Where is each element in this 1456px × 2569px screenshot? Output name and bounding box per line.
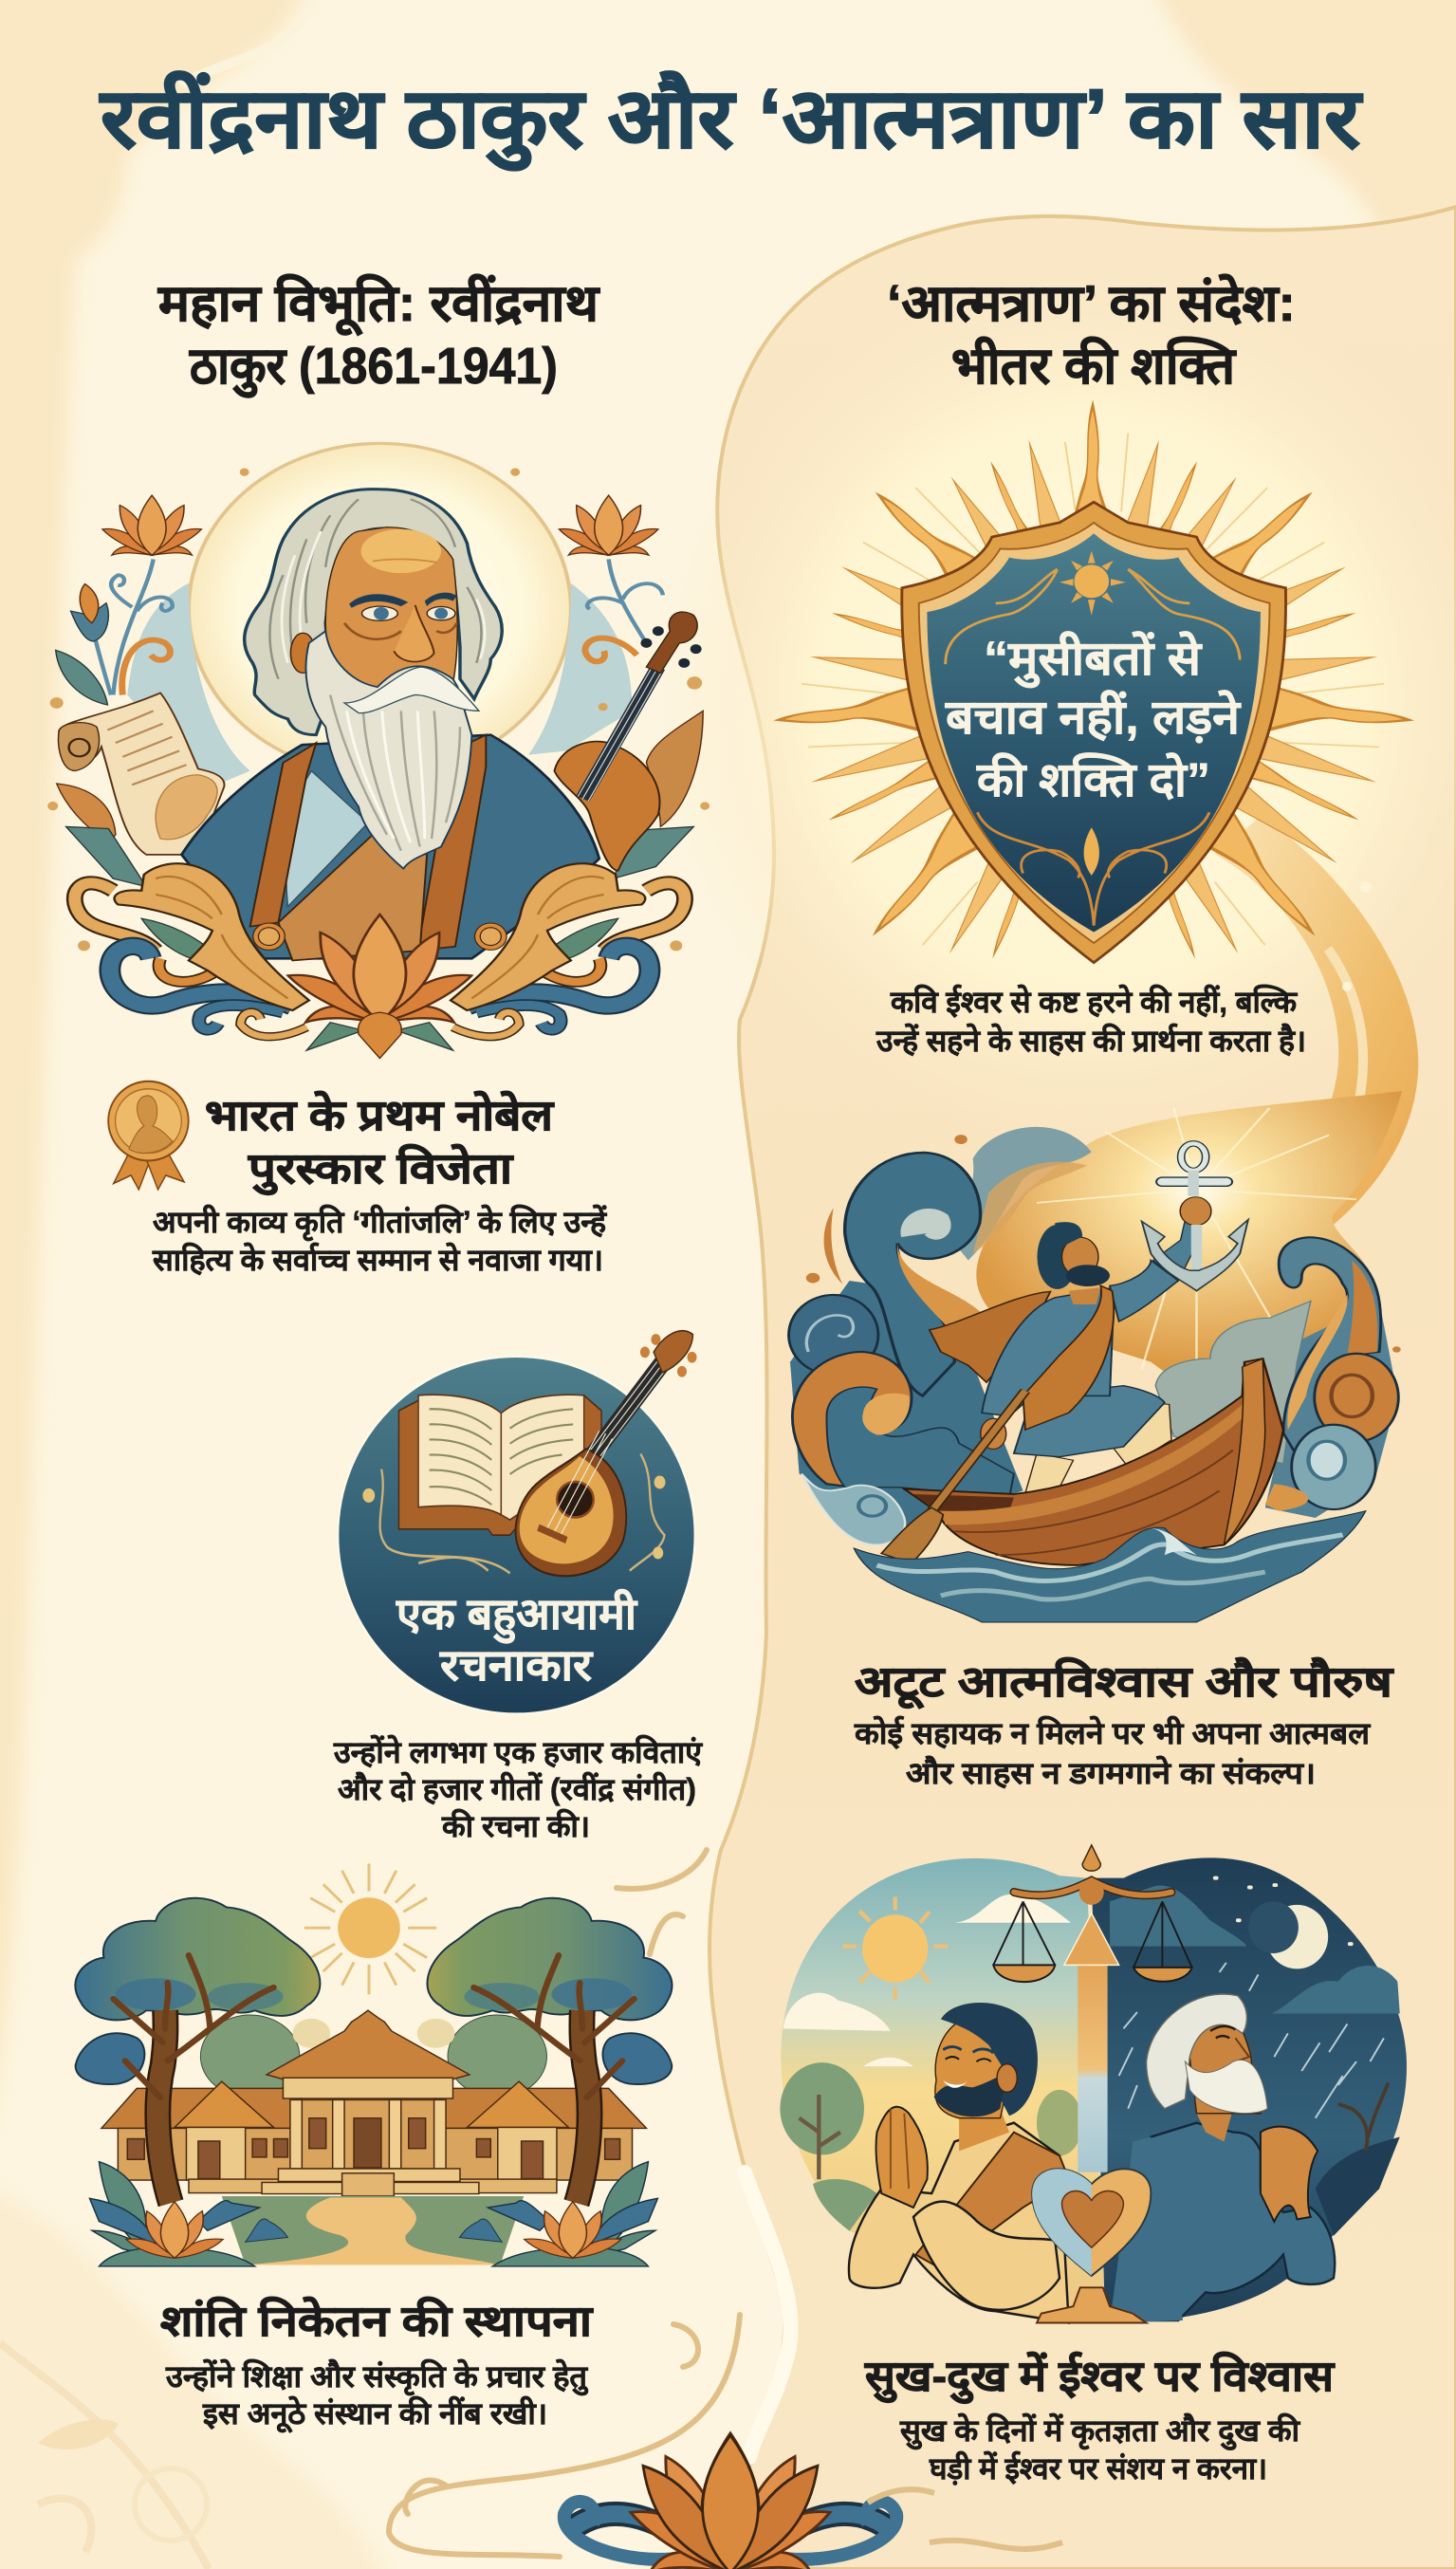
text: Nobel laureate: अपनी काव्य कृति ‘गीतांजलि’ के लिए उन्हें <box>153 1204 607 1242</box>
man <box>930 1197 1211 1501</box>
shield quote: की शक्ति दो” <box>976 752 1210 806</box>
night half <box>1092 1857 1407 2323</box>
decorative dots <box>47 468 710 951</box>
text: Nobel laureate <box>152 1090 607 1277</box>
illustration: man with anchor in boat <box>789 1091 1402 1622</box>
text: Shantiniketan: उन्होंने शिक्षा और संस्कृति के प्रचार हेतु <box>165 2358 589 2396</box>
illustration: Tagore portrait with lotus ornaments <box>47 443 710 1059</box>
shield ornaments <box>946 569 1240 664</box>
title: रवींद्रनाथ ठाकुर और ‘आत्मत्राण’ का सार <box>99 70 1363 171</box>
text: prayer <box>875 984 1306 1058</box>
top lotus flowers <box>102 495 201 555</box>
text: poems and songs: उन्होंने लगभग एक हजार कविताएं <box>333 1734 703 1769</box>
ear <box>290 633 315 673</box>
grey wave behind <box>941 1127 1092 1261</box>
grass and path <box>222 2196 524 2264</box>
text: self-confidence: अटूट आत्मविश्वास और पौरुष <box>855 1656 1394 1710</box>
boat <box>904 1358 1283 1565</box>
text: Nobel laureate: भारत के प्रथम नोबेल <box>205 1090 555 1139</box>
text: self-confidence: कोई सहायक न मिलने पर भी अपना आत्मबल <box>854 1715 1371 1750</box>
panel: right wavy panel <box>710 207 1456 2569</box>
badge label text: एक बहुआयामी <box>396 1589 638 1644</box>
shield sun emblem <box>1060 551 1126 616</box>
pale swirl lower left <box>802 1474 905 1545</box>
orange swirl left <box>792 1352 1014 1498</box>
shield inner blue <box>927 533 1261 933</box>
beard <box>306 631 471 869</box>
shield body <box>902 502 1286 963</box>
heading: left column: ठाकुर (1861-1941) <box>189 338 558 398</box>
footer lotus with scrolls <box>564 2433 1062 2569</box>
nose <box>394 605 434 662</box>
anchor <box>1142 1143 1248 1291</box>
pale thin rays <box>802 434 1384 945</box>
shield quote: “मुसीबतों से <box>984 631 1203 689</box>
left blue swirl <box>789 1295 878 1375</box>
carved ornaments and blue scrolls <box>75 863 309 1037</box>
decorative vine lines <box>389 1850 791 2557</box>
background: top right ornamental border <box>1148 0 1456 531</box>
text: self-confidence: और साहस न डगमगाने का संकल्प। <box>906 1755 1316 1790</box>
shield quote: बचाव नहीं, लड़ने <box>945 690 1242 744</box>
heart and base <box>1032 2169 1151 2323</box>
illustration: Shantiniketan <box>75 1864 673 2266</box>
balance scale <box>993 1845 1192 1982</box>
floral stems <box>94 559 663 695</box>
left tall wave <box>845 1153 986 1395</box>
badge: book and lute <box>338 1331 697 1714</box>
flowing golden stream <box>1214 816 1418 1262</box>
lute <box>516 1331 697 1576</box>
robe <box>181 735 599 958</box>
icon: Nobel medal <box>108 1081 189 1190</box>
text: faith in joy and sorrow: सुख-दुख में ईश्वर पर विश्वास <box>864 2351 1336 2404</box>
building <box>101 2010 646 2196</box>
heading: right column: ‘आत्मत्राण’ का संदेश: <box>887 273 1296 332</box>
violin <box>554 612 703 878</box>
draped cloth <box>278 835 427 960</box>
heading: right column <box>887 273 1296 395</box>
heading: left column <box>157 273 601 398</box>
face <box>325 527 457 691</box>
pale blue background patches <box>127 583 250 786</box>
radiant sky <box>976 1091 1402 1395</box>
open book <box>398 1395 601 1535</box>
sea waves <box>854 1511 1366 1622</box>
text: faith in joy and sorrow: सुख के दिनों में कृतज्ञता और दुख की <box>899 2412 1301 2450</box>
shield quote <box>945 631 1242 806</box>
text: prayer: उन्हें सहने के साहस की प्रार्थना करता है। <box>875 1023 1306 1058</box>
right man praying, grieving <box>1110 1994 1335 2323</box>
moustache <box>344 667 479 713</box>
illustration: scales, joy and sorrow <box>780 1845 1407 2323</box>
halo <box>189 443 571 775</box>
text: faith in joy and sorrow <box>864 2351 1336 2486</box>
shoulder straps <box>250 743 316 927</box>
eyes and brows <box>349 593 456 620</box>
trees and foliage <box>75 1898 330 2098</box>
text: poems and songs: और दो हजार गीतों (रवींद्र संगीत) <box>338 1771 696 1806</box>
oar <box>881 1391 1025 1563</box>
swirl and leaf accents <box>122 640 170 695</box>
grey cloud <box>1155 1301 1311 1464</box>
upward arrow <box>1064 1913 1119 2172</box>
text: faith in joy and sorrow: घड़ी में ईश्वर पर संशय न करना। <box>929 2450 1267 2486</box>
badge label text <box>396 1589 638 1690</box>
sun <box>304 1864 436 1994</box>
text: prayer: कवि ईश्वर से कष्ट हरने की नहीं, बल्कि <box>890 984 1298 1019</box>
right waves <box>1265 1237 1398 1511</box>
trunks, leaves and lotuses <box>90 1955 287 2266</box>
inner shirt <box>286 771 368 907</box>
sun rays <box>776 405 1411 960</box>
heading: right column: भीतर की शक्ति <box>951 336 1237 395</box>
text: self-confidence <box>854 1656 1394 1790</box>
hair <box>245 490 502 735</box>
spray dots <box>806 1135 1401 1353</box>
text: Shantiniketan: शांति निकेतन की स्थापना <box>160 2296 594 2345</box>
background: left ornamental border <box>0 0 398 2569</box>
wave masses <box>790 1281 1397 1538</box>
bottom centre lotus <box>288 915 471 1059</box>
text: Shantiniketan: इस अनूठे संस्थान की नींब रखी। <box>202 2395 547 2433</box>
day half <box>780 1858 1105 2320</box>
badge label text: रचनाकार <box>439 1640 594 1690</box>
text: Nobel laureate: साहित्य के सर्वाच्च सम्मान से नवाजा गया। <box>152 1242 603 1277</box>
text: Shantiniketan <box>160 2296 594 2433</box>
shield with sun rays <box>776 405 1411 963</box>
scroll <box>57 693 224 887</box>
blue circle <box>338 1357 695 1714</box>
text: Nobel laureate: पुरस्कार विजेता <box>248 1143 514 1195</box>
panel glow behind shield <box>664 256 1456 1148</box>
heading: left column: महान विभूति: रवींद्रनाथ <box>157 273 601 336</box>
left man praying, smiling <box>849 2003 1069 2323</box>
text: poems and songs <box>333 1734 703 1843</box>
text: poems and songs: की रचना की। <box>441 1808 590 1843</box>
squiggles <box>380 1453 665 1573</box>
